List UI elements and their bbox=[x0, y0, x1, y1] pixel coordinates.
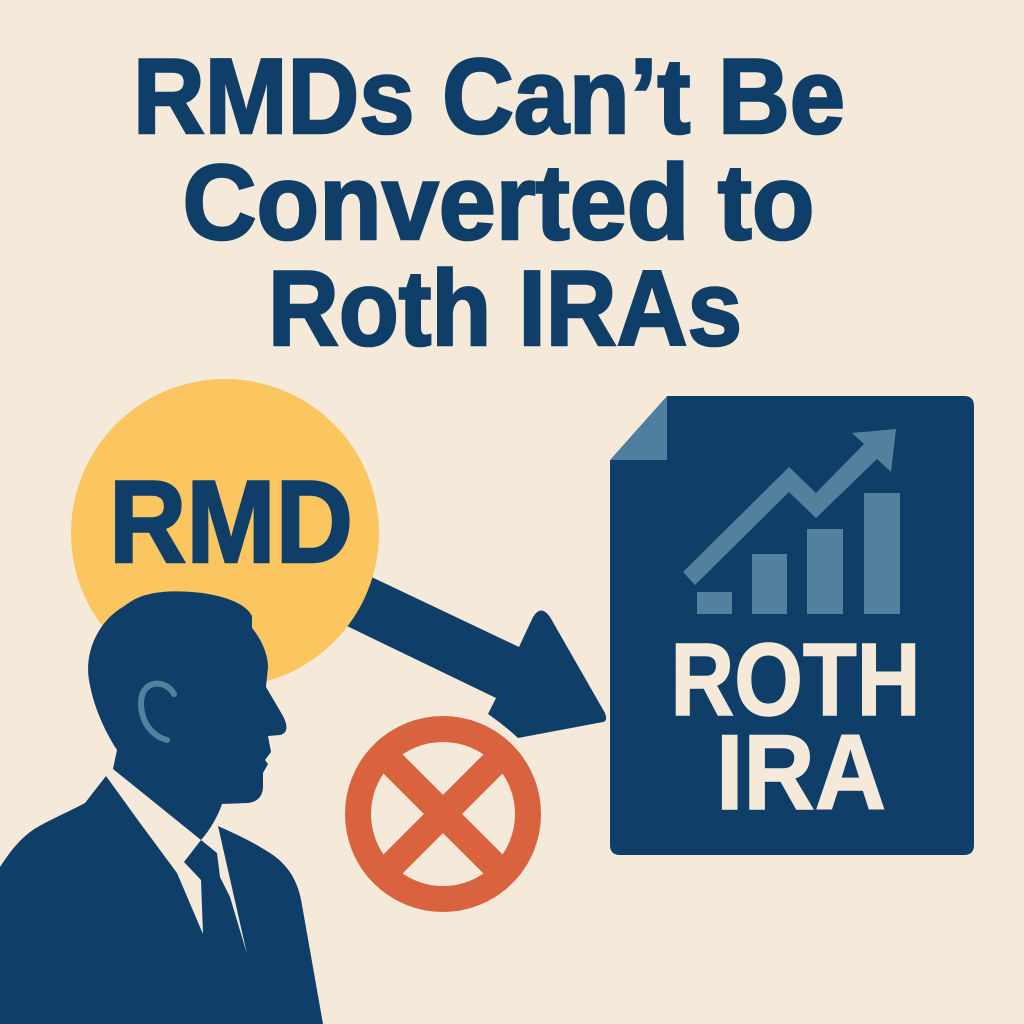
title bbox=[133, 36, 845, 368]
prohibited icon bbox=[358, 729, 528, 899]
title: Converted to bbox=[182, 142, 814, 262]
document label: ROTH bbox=[670, 622, 920, 737]
RMD circle: RMD bbox=[109, 456, 353, 587]
ear bbox=[141, 684, 174, 740]
arrow bbox=[320, 562, 606, 738]
document label bbox=[670, 622, 920, 832]
document folded corner bbox=[610, 396, 667, 460]
suit jacket and tie bbox=[0, 776, 323, 1024]
Roth IRA document bbox=[610, 396, 974, 855]
person silhouette bbox=[0, 591, 323, 1024]
bar chart with rising arrow bbox=[683, 429, 900, 614]
head and neck bbox=[88, 591, 286, 840]
document label: IRA bbox=[716, 712, 886, 832]
title: RMDs Can’t Be bbox=[133, 36, 845, 156]
title: Roth IRAs bbox=[268, 248, 742, 368]
RMD circle bbox=[71, 379, 379, 687]
